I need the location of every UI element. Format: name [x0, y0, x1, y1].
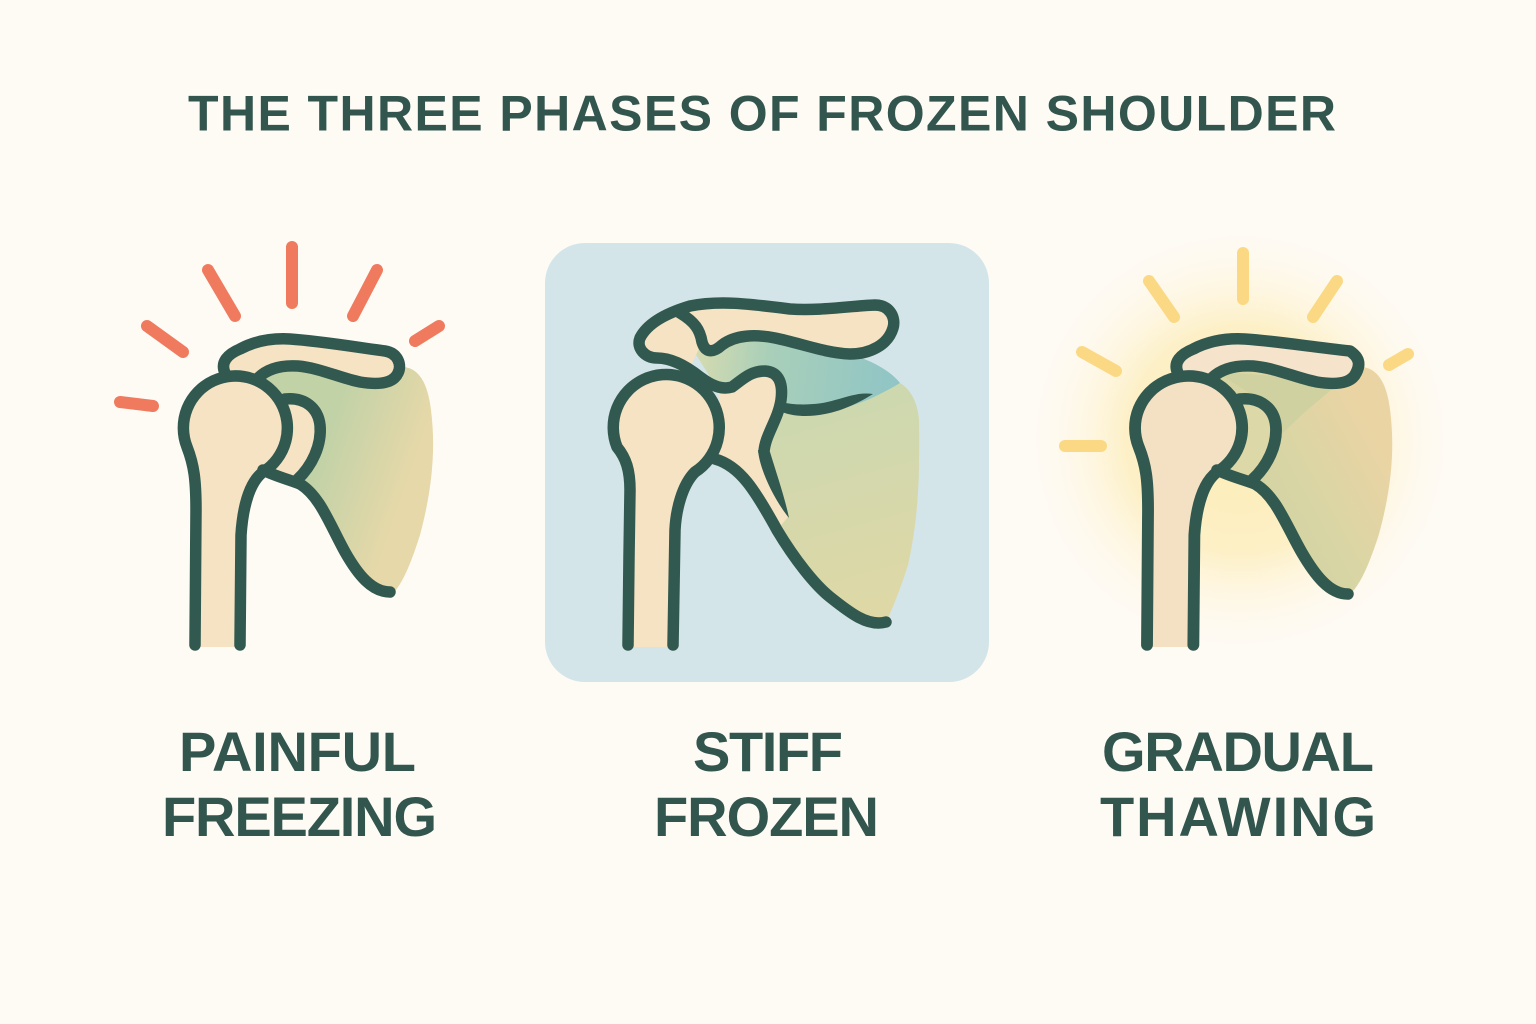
label: painful freezing: FREEZING — [162, 785, 437, 848]
title: THE THREE PHASES OF FROZEN SHOULDER — [188, 86, 1336, 142]
icon: red pain rays — [120, 247, 439, 406]
label: painful freezing — [162, 720, 437, 848]
label: stiff frozen — [654, 720, 879, 848]
icon: shoulder joint, painful phase — [183, 339, 433, 647]
label: stiff frozen: FROZEN — [654, 785, 879, 848]
panel: stiff frozen — [545, 243, 989, 682]
label: gradual thawing: THAWING — [1100, 785, 1376, 848]
panel background: blue rounded square — [545, 243, 989, 682]
label: gradual thawing — [1100, 720, 1376, 848]
panel: painful freezing — [120, 247, 439, 647]
panel: gradual thawing — [1015, 215, 1465, 665]
label: painful freezing: PAINFUL — [179, 720, 416, 783]
label: stiff frozen: STIFF — [693, 720, 843, 783]
icon: yellow thaw rays — [1065, 253, 1408, 446]
icon: shoulder joint, thawing phase — [1135, 339, 1392, 647]
warm glow — [1015, 215, 1465, 665]
icon: shoulder joint, frozen phase — [613, 303, 919, 647]
label: gradual thawing: GRADUAL — [1102, 720, 1374, 783]
